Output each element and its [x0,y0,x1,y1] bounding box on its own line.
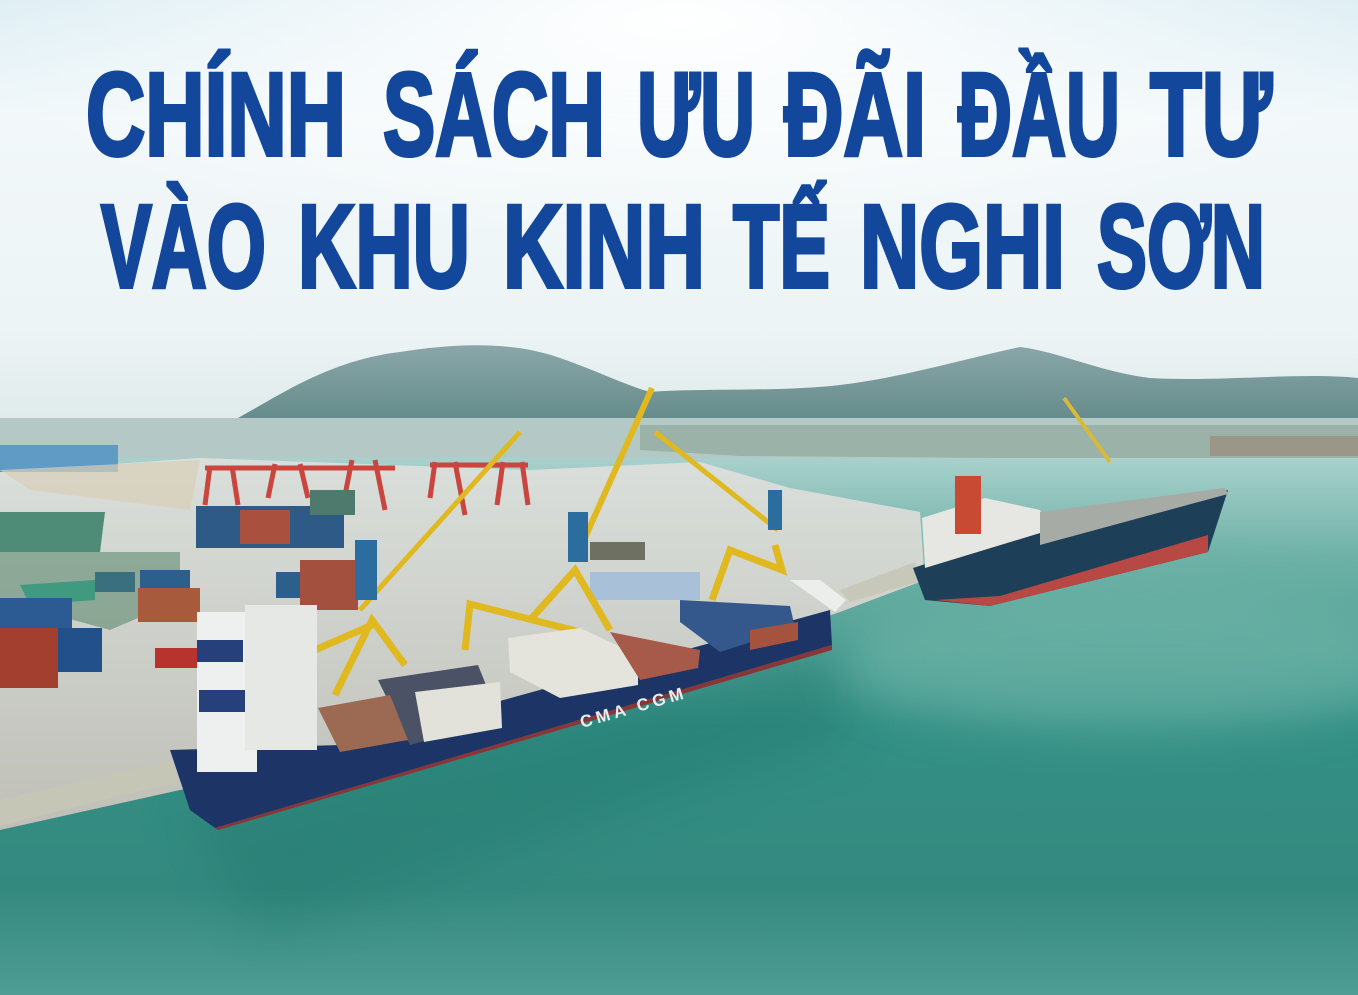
title line 1: ĐÃI [784,49,926,181]
title line 2: TẾ [733,180,830,313]
background: mountains [0,345,1358,470]
title line 1: CHÍNH [86,49,346,181]
yellow cranes [315,388,782,695]
title line 2 [101,180,1265,313]
title line 2: SƠN [1097,181,1265,313]
title [86,48,1272,313]
title line 1: TƯ [1150,49,1272,181]
title line 1: SÁCH [383,49,605,181]
bulk carrier ship right [913,398,1228,606]
title line 2: VÀO [101,181,266,313]
title line 2: KHU [298,181,470,313]
title line 2: NGHI [860,181,1065,313]
title line 1 [86,48,1272,181]
ship hull lettering: CMA CGM [578,683,689,732]
title line 1: ĐẦU [958,48,1120,181]
port yard [0,445,925,830]
container stacks on yard [0,490,700,688]
title line 1: ƯU [637,49,755,181]
background: sky [0,0,1358,470]
title line 2: KINH [503,181,705,313]
container ship [170,580,846,830]
red gantry cranes [205,460,528,515]
background: sea water [0,458,1358,995]
